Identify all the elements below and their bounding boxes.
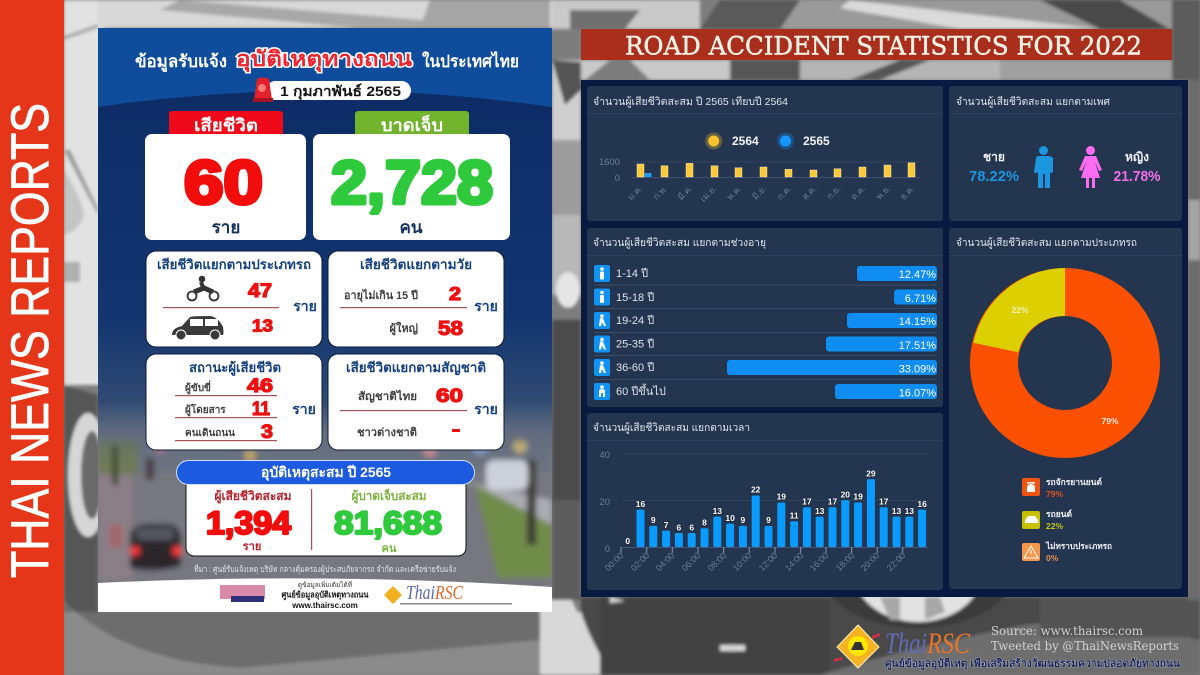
hourly bar chart: 16:00 xyxy=(808,550,830,573)
legend: cars xyxy=(1022,509,1073,531)
poster road photo xyxy=(98,436,552,582)
poster title: ข้อมูลรับแจ้ง xyxy=(135,52,227,73)
donut chart xyxy=(973,268,1136,434)
hourly bar chart: 14:00 xyxy=(783,550,805,573)
icon: male figure xyxy=(1034,146,1053,188)
card: deaths by status: ผู้ขับขี่ xyxy=(185,380,211,395)
panel: deaths 2565 vs 2564 xyxy=(587,86,943,221)
panel: deaths 2565 vs 2564: จำนวนผู้เสียชีวิตสะสม ปี 2565 เทียบปี 2564 xyxy=(593,95,788,108)
hourly bar chart: 04:00 xyxy=(654,550,676,573)
card: deaths by age: 2 xyxy=(449,284,461,304)
legend: motorcycles: 79% xyxy=(1046,489,1063,499)
poster footer logos and website xyxy=(220,580,512,610)
hourly bar chart: 18:00 xyxy=(834,550,856,573)
hourly bar chart: 9 xyxy=(741,515,746,525)
legend: unknown type xyxy=(1022,541,1112,563)
card: cumulative accidents 2565: อุบัติเหตุสะสม ปี 2565 xyxy=(261,464,391,481)
source credit: Source: www.thairsc.com xyxy=(991,624,1144,638)
card: cumulative accidents 2565: 1,394 xyxy=(206,505,291,541)
card: injured today: คน xyxy=(400,218,423,237)
monthly bar chart: ก.ค. xyxy=(775,183,793,202)
ThaiRSC logo xyxy=(834,625,1180,671)
poster title: ในประเทศไทย xyxy=(422,51,519,71)
hourly bar chart: 20 xyxy=(841,490,850,500)
panel: deaths by gender: 78.22% xyxy=(969,168,1019,185)
panel: deaths by vehicle type: จำนวนผู้เสียชีวิตสะสม แยกตามประเภทรถ xyxy=(956,236,1137,249)
hourly bar chart: 12:00 xyxy=(757,550,779,573)
ThaiRSC logo: ศูนย์ข้อมูลอุบัติเหตุ เพื่อเสริมสร้างวัฒนธรรมความปลอดภัยทางถนน xyxy=(885,655,1180,671)
card: deaths by vehicle type: เสียชีวิตแยกตามประเภทรถ xyxy=(157,257,311,272)
panel: deaths by gender: จำนวนผู้เสียชีวิตสะสม แยกตามเพศ xyxy=(956,95,1110,108)
panel: deaths by time of day xyxy=(587,413,943,590)
row 15-18 xyxy=(594,288,937,306)
monthly bar chart: 0 xyxy=(615,173,620,184)
hourly bar chart: 17 xyxy=(879,496,889,506)
hourly bar chart: 19 xyxy=(853,492,863,502)
hourly bar chart: 13 xyxy=(713,506,722,516)
hourly bar chart: 9 xyxy=(766,515,771,525)
row 19-24: 19-24 ปี xyxy=(616,314,654,327)
hourly bar chart: 9 xyxy=(651,515,656,525)
row 19-24: 14.15% xyxy=(899,316,936,328)
card: deaths today: ราย xyxy=(212,218,240,237)
monthly bar chart: ส.ค. xyxy=(800,183,818,202)
poster title xyxy=(135,48,519,73)
hourly bar chart: 16 xyxy=(917,499,927,509)
card: deaths by nationality xyxy=(328,354,504,450)
row 36-60 xyxy=(594,359,937,376)
card: deaths by nationality: สัญชาติไทย xyxy=(358,389,417,403)
card: injured today: 2,728 xyxy=(331,148,493,216)
card: deaths by vehicle type: 47 xyxy=(248,281,272,302)
card: deaths by vehicle type: 13 xyxy=(252,316,273,336)
row 25-35: 25-35 ปี xyxy=(616,338,654,350)
card: cumulative accidents 2565: ราย xyxy=(243,541,261,553)
row 60+ xyxy=(594,383,937,400)
hourly bar chart: 19 xyxy=(777,492,786,502)
card: cumulative accidents 2565: ผู้บาดเจ็บสะสม xyxy=(352,488,426,504)
monthly bar chart: ต.ค. xyxy=(849,183,867,202)
hourly bar chart: 10:00 xyxy=(731,550,753,573)
card: deaths by status: ราย xyxy=(292,401,316,417)
card: deaths by age: เสียชีวิตแยกตามวัย xyxy=(360,257,472,272)
card: deaths today: เสียชีวิต xyxy=(194,115,258,135)
monthly bar chart: เม.ย. xyxy=(698,183,718,204)
card: cumulative accidents 2565: 81,688 xyxy=(334,505,442,541)
icon: female figure xyxy=(1079,146,1102,188)
hourly bar chart: 0 xyxy=(605,544,610,555)
monthly bar chart: มี.ค. xyxy=(676,183,694,202)
poster source note: ที่มา : ศูนย์รับแจ้งเหตุ บริษัท กลางคุ้มครองผู้ประสบภัยจากรถ จำกัด และเครือข่ายรับแจ้ง xyxy=(194,563,456,575)
donut chart: 79% xyxy=(1101,416,1119,426)
donut chart: 22% xyxy=(1011,305,1029,315)
ThaiRSC logo: Thai xyxy=(885,627,927,660)
hourly bar chart: 08:00 xyxy=(706,550,728,573)
row 25-35: 17.51% xyxy=(899,340,936,352)
card: deaths by status xyxy=(146,354,322,450)
card: deaths by status: 46 xyxy=(247,376,273,397)
row 1-14: 12.47% xyxy=(899,269,936,281)
monthly bar chart xyxy=(599,157,920,204)
card: deaths by nationality: เสียชีวิตแยกตามสัญชาติ xyxy=(346,360,486,376)
monthly bar chart: พ.ย. xyxy=(874,183,892,202)
panel: deaths by time of day: จำนวนผู้เสียชีวิตสะสม แยกตามเวลา xyxy=(593,421,750,434)
legend: cars: 22% xyxy=(1046,521,1063,531)
card: deaths by age xyxy=(328,251,504,347)
poster footer logos and website: www.thairsc.com xyxy=(291,601,358,610)
date pill with siren icon xyxy=(253,78,411,102)
card: cumulative accidents 2565: คน xyxy=(382,543,397,555)
card: deaths by nationality: ราย xyxy=(474,401,498,417)
hourly bar chart: 13 xyxy=(892,506,901,516)
hourly bar chart: 10 xyxy=(725,513,735,523)
chart legend: 2564 xyxy=(732,134,759,148)
hourly bar chart: 6 xyxy=(689,522,694,532)
hourly bar chart: 20:00 xyxy=(859,550,881,573)
panel: deaths by gender xyxy=(949,86,1182,221)
card: injured today: บาดเจ็บ xyxy=(381,113,443,135)
row 15-18: 15-18 ปี xyxy=(616,291,654,304)
monthly bar chart: ม.ค. xyxy=(626,183,644,202)
card: cumulative accidents 2565 xyxy=(176,460,474,556)
hourly bar chart: 22:00 xyxy=(885,550,907,573)
monthly bar chart: มิ.ย. xyxy=(750,183,768,202)
hourly bar chart: 00:00 xyxy=(603,550,625,573)
ThaiRSC logo: RSC xyxy=(926,627,971,660)
monthly bar chart: พ.ค. xyxy=(725,183,743,202)
monthly bar chart: ก.พ. xyxy=(651,183,669,202)
card: deaths today: 60 xyxy=(184,148,263,216)
row 1-14 xyxy=(594,265,937,282)
hourly bar chart xyxy=(599,450,928,573)
legend: motorcycles: รถจักรยานยนต์ xyxy=(1046,477,1102,487)
legend: motorcycles xyxy=(1022,477,1102,499)
poster footer white strip xyxy=(98,578,552,612)
poster footer logos and website: ThaiRSC xyxy=(406,582,464,604)
icon: car xyxy=(172,316,224,340)
panel: deaths by gender: หญิง xyxy=(1125,150,1149,164)
poster: road accident report 1 February 2565 xyxy=(98,28,552,612)
hourly bar chart: 40 xyxy=(599,450,610,461)
poster title: อุบัติเหตุทางถนน xyxy=(236,48,413,73)
row 1-14: 1-14 ปี xyxy=(616,267,648,280)
card: deaths by vehicle type xyxy=(146,251,322,347)
card: deaths by age: ผู้ใหญ่ xyxy=(390,321,418,336)
side band: THAI NEWS REPORTS: THAI NEWS REPORTS xyxy=(1,103,60,578)
poster footer logos and website: ศูนย์ข้อมูลอุบัติเหตุทางถนน xyxy=(282,590,369,600)
hourly bar chart: 13 xyxy=(905,506,914,516)
row 36-60: 33.09% xyxy=(899,364,936,376)
hourly bar chart: 20 xyxy=(599,497,610,508)
row 25-35 xyxy=(594,336,937,352)
hourly bar chart: 13 xyxy=(815,506,825,516)
card: deaths by status: ผู้โดยสาร xyxy=(185,403,226,417)
hourly bar chart: 0 xyxy=(625,536,630,546)
row 36-60: 36-60 ปี xyxy=(616,361,654,374)
row 60+: 16.07% xyxy=(899,388,936,400)
hourly bar chart: 6 xyxy=(677,522,682,532)
row 19-24 xyxy=(594,312,937,329)
card: deaths by age: อายุไม่เกิน 15 ปี xyxy=(344,288,418,303)
card: cumulative accidents 2565: ผู้เสียชีวิตสะสม xyxy=(214,489,292,504)
chart legend: 2565 xyxy=(803,134,830,148)
legend: unknown type: ไม่ทราบประเภทรถ xyxy=(1045,541,1112,551)
card: deaths by status: 11 xyxy=(252,399,270,420)
poster header blue band xyxy=(98,28,552,107)
card: deaths by status: สถานะผู้เสียชีวิต xyxy=(189,360,281,376)
card: injured today xyxy=(313,111,510,240)
date pill with siren icon: 1 กุมภาพันธ์ 2565 xyxy=(280,83,401,100)
monthly bar chart: ก.ย. xyxy=(824,183,842,201)
poster footer logos and website: ดูข้อมูลเพิ่มเติมได้ที่ xyxy=(298,580,352,589)
panel: deaths by vehicle type xyxy=(949,228,1182,589)
card: deaths by age: ราย xyxy=(474,298,498,314)
card: deaths by nationality: ชาวต่างชาติ xyxy=(357,426,417,439)
monthly bar chart: 1600 xyxy=(599,157,620,168)
dashboard container xyxy=(581,80,1188,597)
panel: deaths by gender: ชาย xyxy=(983,150,1005,164)
panel: deaths by gender: 21.78% xyxy=(1114,168,1160,185)
legend: cars: รถยนต์ xyxy=(1046,509,1073,519)
source credit: Tweeted by @ThaiNewsReports xyxy=(991,639,1179,653)
chart legend xyxy=(705,132,830,150)
card: deaths by age: 58 xyxy=(438,318,463,340)
hourly bar chart: 17 xyxy=(802,496,812,506)
hourly bar chart: 17 xyxy=(828,496,837,506)
monthly bar chart: ธ.ค. xyxy=(898,183,916,202)
card: deaths today xyxy=(145,111,306,240)
title bar: ROAD ACCIDENT STATISTICS FOR 2022 xyxy=(625,32,1142,60)
hourly bar chart: 02:00 xyxy=(629,550,651,573)
card: deaths by status: คนเดินถนน xyxy=(185,427,235,439)
hourly bar chart: 8 xyxy=(702,518,707,528)
legend: unknown type: 0% xyxy=(1046,553,1059,563)
panel: deaths by age group: จำนวนผู้เสียชีวิตสะสม แยกตามช่วงอายุ xyxy=(593,236,766,249)
hourly bar chart: 29 xyxy=(866,468,876,478)
source credit xyxy=(991,624,1179,653)
hourly bar chart: 11 xyxy=(790,510,799,520)
row 60+: 60 ปีขึ้นไป xyxy=(616,383,666,398)
hourly bar chart: 16 xyxy=(636,499,645,509)
card: deaths by nationality: 60 xyxy=(436,386,463,407)
hourly bar chart: 7 xyxy=(664,520,669,530)
card: deaths by status: 3 xyxy=(261,422,273,443)
row 15-18: 6.71% xyxy=(905,293,936,305)
icon: motorcycle xyxy=(188,277,218,300)
hourly bar chart: 22 xyxy=(751,484,761,494)
panel: deaths by age group xyxy=(587,228,943,407)
card: deaths by vehicle type: ราย xyxy=(293,298,317,314)
hourly bar chart: 06:00 xyxy=(680,550,702,573)
